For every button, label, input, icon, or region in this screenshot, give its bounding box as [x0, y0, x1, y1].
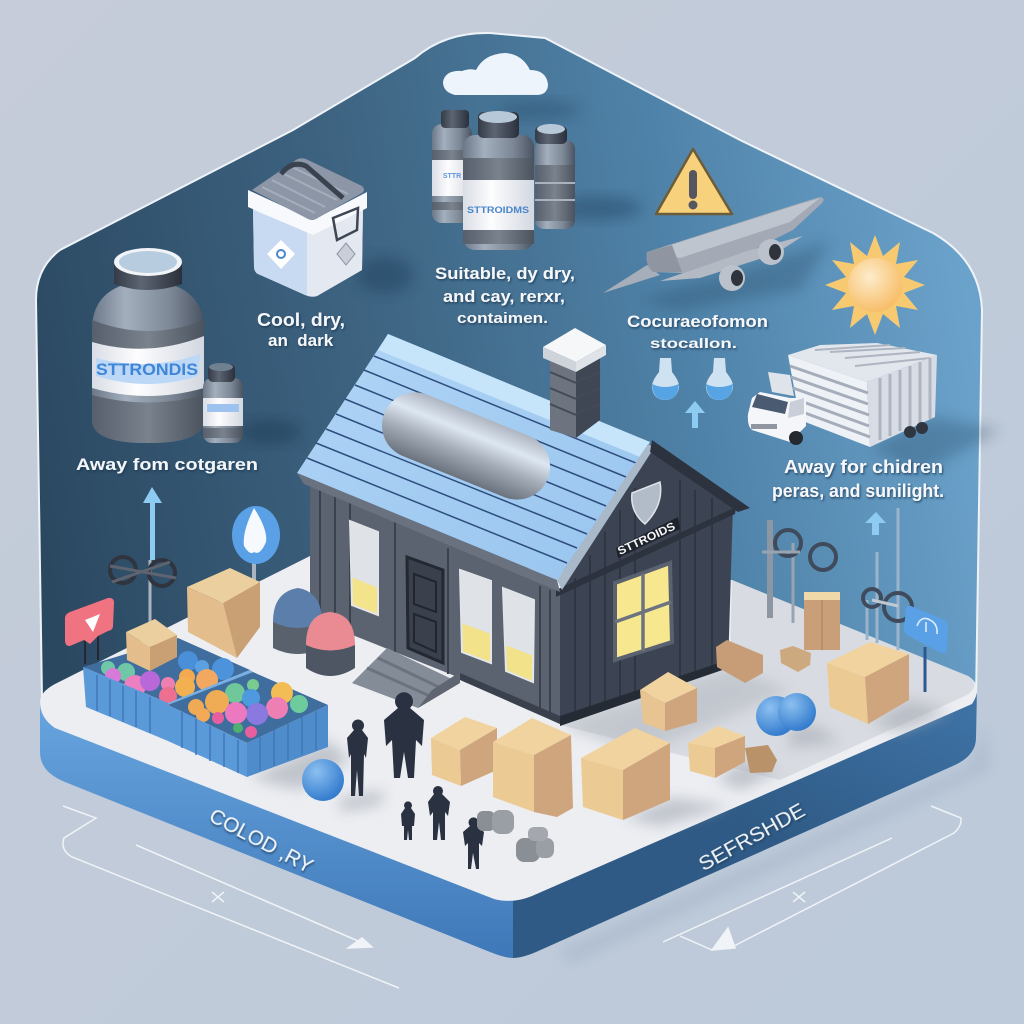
box: small front right — [688, 726, 777, 778]
icon: cloud — [443, 53, 548, 95]
shield — [632, 482, 661, 524]
box: front row b — [493, 718, 573, 817]
icon: three bottles: STTR — [443, 173, 461, 180]
arrow: up right — [865, 512, 886, 535]
platform: object shadows — [250, 700, 950, 826]
text: away for children: peras, and sunilight. — [772, 481, 944, 501]
icon: large bottle and vial: STTRONDIS — [96, 360, 198, 379]
window: mid — [460, 570, 491, 663]
icon: three bottles: STTROIDMS — [467, 205, 529, 215]
bin: left with balls — [83, 638, 253, 741]
text: concentration label: Cocuraeofomon — [627, 312, 768, 331]
text: cool, dry, dark — [257, 310, 345, 350]
dimension lines — [63, 806, 961, 988]
house shadow — [560, 668, 790, 755]
icon: large bottle and vial — [92, 248, 300, 444]
text: colod ry: COLOD ,RY — [205, 804, 317, 878]
bin: right with balls — [168, 672, 328, 777]
icon: sun — [825, 235, 925, 335]
stones: grey — [477, 810, 554, 862]
icon: cool box — [248, 158, 413, 297]
equipment: left rack — [110, 557, 176, 622]
roof pill — [372, 382, 560, 510]
roof — [297, 334, 650, 580]
house — [297, 328, 750, 726]
text: concentration label — [627, 312, 768, 351]
balls: blue spheres — [302, 693, 816, 801]
icon: flasks and arrow — [652, 358, 733, 428]
text: concentration label: stocallon. — [650, 335, 737, 351]
arrow: up left — [143, 487, 162, 560]
icon: water drop badge — [232, 506, 280, 580]
text: suitable container — [435, 264, 575, 327]
boxes: cardboard — [126, 568, 909, 820]
text: away from cotgaren: Away fom cotgaren — [76, 455, 258, 474]
box: near house — [640, 672, 697, 731]
icon: three bottles — [432, 100, 642, 250]
steps — [352, 648, 460, 708]
window: left — [350, 521, 378, 615]
box: small on bin — [126, 619, 177, 671]
wall: front — [310, 478, 560, 724]
wall: gable side — [560, 450, 733, 725]
icon: truck — [748, 343, 1000, 475]
door — [407, 557, 443, 663]
icon: pink heart badge — [65, 598, 114, 664]
text: cool, dry, dark: Cool, dry, — [257, 310, 345, 330]
text: away for children: Away for chidren — [784, 457, 943, 477]
box: large left — [187, 568, 260, 658]
text: cool, dry, dark: an dark — [268, 331, 334, 350]
figures: silhouettes — [347, 692, 484, 869]
box: large right — [827, 642, 909, 724]
equipment: right racks — [762, 508, 912, 650]
platform shadow — [560, 720, 990, 965]
box: front row c — [581, 728, 670, 820]
icon: aircraft — [603, 197, 830, 310]
window: right — [615, 563, 672, 660]
platform: grey shading right — [560, 580, 974, 780]
text: suitable container: Suitable, dy dry, — [435, 264, 575, 283]
text: sefrshde: SEFRSHDE — [695, 800, 809, 876]
icon: blue sign — [904, 606, 948, 692]
panel: dark hexagon backdrop — [36, 33, 982, 900]
box: right group — [716, 592, 840, 683]
text: suitable container: contaimen. — [457, 310, 548, 327]
chimney — [550, 355, 576, 438]
platform: top surface — [40, 556, 977, 901]
platform: left side wall — [40, 700, 513, 958]
text: away for children — [772, 457, 944, 501]
text: suitable container: and cay, rerxr, — [443, 287, 565, 306]
sign: STTROIDS — [616, 521, 678, 558]
platform: right side wall — [513, 690, 977, 958]
window: right front — [503, 588, 534, 682]
box: front row a — [431, 717, 497, 786]
icon: warning triangle — [656, 149, 732, 214]
tanks — [273, 588, 355, 676]
